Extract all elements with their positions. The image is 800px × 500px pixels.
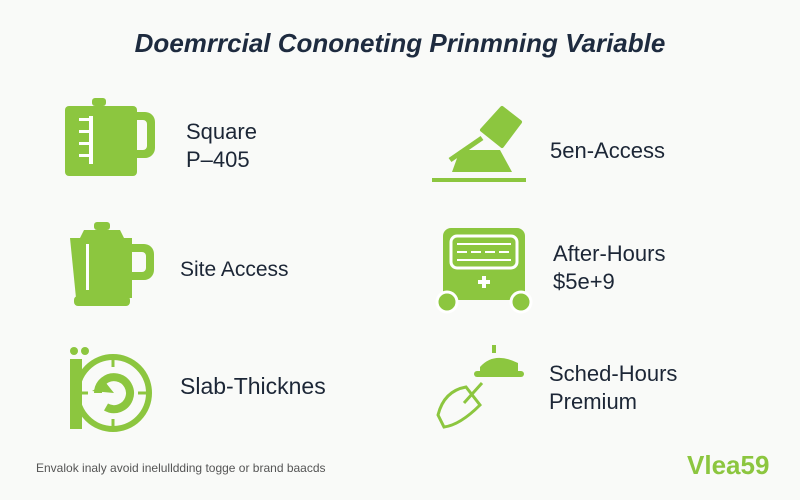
text: Square: Square xyxy=(186,119,257,144)
brand logo: Vlea59 xyxy=(687,450,769,480)
text: Sched-Hours Premium: Premium xyxy=(549,389,637,414)
icon: cake cover xyxy=(436,345,524,429)
text: After-Hours xyxy=(553,241,665,294)
icon: gavel xyxy=(432,106,526,182)
text: 5en-Access: 5en-Access xyxy=(550,138,665,163)
icon: kettle xyxy=(70,222,154,306)
text: Slab-Thicknes: Slab-Thicknes xyxy=(180,373,326,399)
text: After-Hours: After-Hours xyxy=(553,241,665,266)
text: Square: P‒405 xyxy=(186,147,250,172)
footer note: Envalok inaly avoid inelulldding togge or brand baacds xyxy=(36,461,326,475)
icon: target dial xyxy=(70,347,152,432)
icon: heater cart xyxy=(438,228,530,310)
text: Site Access: Site Access xyxy=(180,258,289,281)
text: Sched-Hours Premium: Sched-Hours xyxy=(549,361,677,386)
text: Square xyxy=(186,119,257,172)
title: Doemrrcial Cononeting Prinmning Variable xyxy=(135,28,665,58)
text: Sched-Hours Premium xyxy=(549,361,677,414)
icon: measuring jug xyxy=(65,98,155,176)
text: After-Hours: $5e+9 xyxy=(553,269,615,294)
